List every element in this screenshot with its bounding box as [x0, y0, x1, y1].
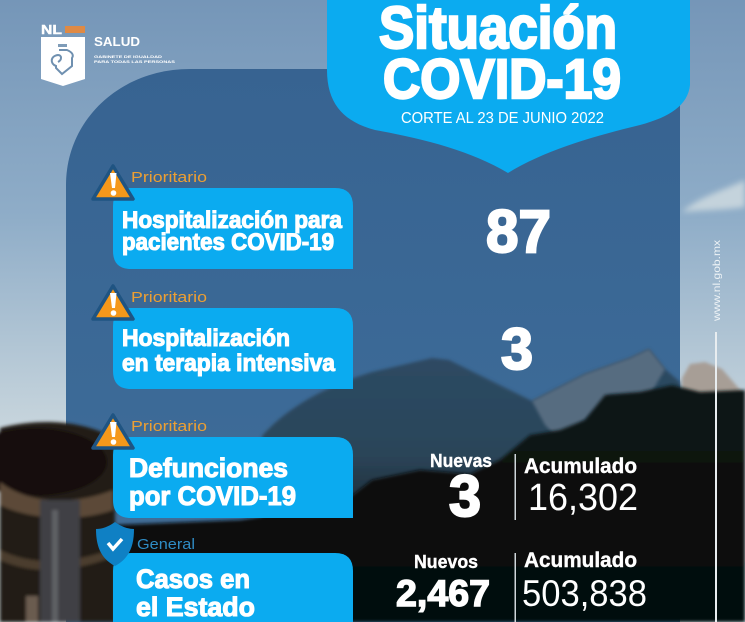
label Nuevos: Nuevos	[414, 552, 478, 572]
date line: CORTE AL 23 DE JUNIO 2022	[401, 110, 604, 127]
value cumulative: 16,302	[528, 477, 638, 519]
value 3: 3	[501, 317, 533, 382]
logo tagline 2: PARA TODAS LAS PERSONAS	[94, 59, 175, 64]
label General: General	[137, 536, 195, 553]
logo shield emblem	[52, 50, 73, 74]
pill text 2: por COVID-19	[129, 481, 296, 511]
logo shield	[41, 37, 85, 86]
background photo: lit mountain slope	[532, 349, 665, 440]
row: hospitalización COVID-19	[93, 166, 551, 269]
value new cases: 2,467	[396, 573, 490, 614]
value cumulative cases: 503,838	[522, 573, 647, 614]
label Prioritario: Prioritario	[131, 418, 207, 435]
value 87: 87	[486, 198, 551, 265]
label Prioritario: Prioritario	[131, 169, 207, 186]
row: terapia intensiva	[93, 286, 533, 389]
vertical line	[715, 332, 717, 622]
pill text: Hospitalización para	[122, 207, 343, 234]
shield icon	[96, 522, 134, 566]
blue panel	[66, 69, 680, 622]
warning icon	[93, 415, 133, 448]
logo SALUD: SALUD	[94, 35, 140, 49]
logo: NL Salud	[41, 22, 175, 86]
warning icon	[93, 166, 133, 199]
pill text: Defunciones	[129, 453, 288, 483]
pill	[113, 308, 353, 389]
logo crown	[58, 44, 67, 47]
header banner	[327, 0, 690, 173]
pill text: Hospitalización	[122, 325, 290, 352]
pill text 2: en terapia intensiva	[122, 350, 336, 377]
background photo: trees	[115, 385, 745, 622]
value new 3: 3	[449, 464, 481, 529]
background photo: fountain	[0, 422, 115, 622]
cloud	[682, 180, 745, 212]
row: casos en el estado	[96, 522, 647, 622]
divider	[514, 454, 516, 520]
logo tagline: GABINETE DE IGUALDAD	[94, 54, 162, 59]
logo wordmark NL: NL	[41, 22, 62, 37]
logo orange bar	[65, 26, 85, 33]
background photo: rock peak	[682, 362, 742, 420]
background photo: mountain	[262, 349, 680, 540]
label Acumulado: Acumulado	[524, 549, 637, 572]
label Nuevas: Nuevas	[430, 451, 492, 471]
label Prioritario: Prioritario	[131, 289, 207, 306]
row: defunciones	[93, 415, 638, 529]
warning icon	[93, 286, 133, 319]
pill text 2: pacientes COVID-19	[122, 229, 334, 256]
pill text 2: el Estado	[136, 592, 255, 622]
pill	[113, 437, 353, 518]
pill	[113, 553, 353, 622]
title: COVID-19: COVID-19	[383, 47, 621, 110]
website vertical text: www.nl.gob.mx	[712, 240, 723, 322]
pill	[113, 188, 353, 269]
label Acumulado: Acumulado	[524, 455, 637, 478]
divider	[514, 553, 516, 622]
pill text: Casos en	[136, 564, 250, 594]
